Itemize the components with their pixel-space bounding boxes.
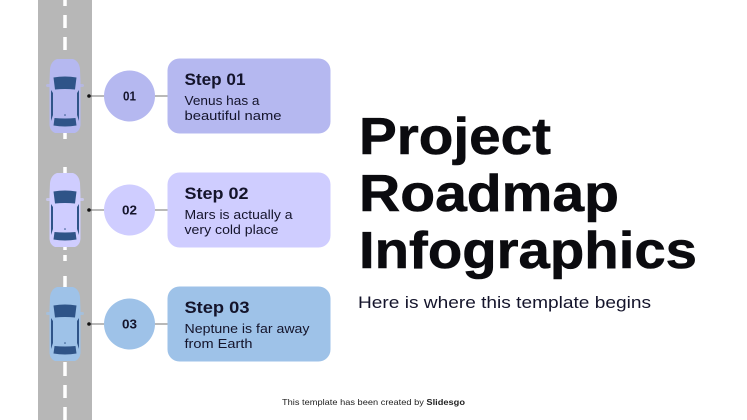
subtitle: Here is where this template begins — [358, 294, 651, 312]
connector 1 — [87, 94, 168, 98]
panel: step 3: Neptune is far away — [184, 321, 310, 336]
panel: step 3: Step 03 — [184, 298, 250, 317]
car 3 — [46, 287, 84, 361]
panel: step 2: very cold place — [184, 222, 278, 237]
panel: step 3 — [168, 286, 330, 362]
connector 2 — [87, 208, 168, 212]
car 2 — [46, 173, 84, 247]
panel: step 2: Step 02 — [184, 184, 248, 203]
step 1 number badge — [104, 70, 155, 122]
road — [38, 0, 92, 420]
title — [359, 108, 697, 280]
panel: step 1 — [168, 58, 330, 134]
panel: step 2 — [168, 172, 330, 248]
panel: step 2: Mars is actually a — [184, 207, 293, 222]
panel: step 1: Venus has a — [184, 93, 260, 108]
step 3 number badge: 03 — [122, 318, 137, 332]
title: Infographics — [359, 222, 697, 280]
panel: step 1: Step 01 — [184, 70, 246, 89]
step 2 number badge — [104, 184, 155, 236]
step 2 number badge: 02 — [122, 204, 137, 218]
title: Project — [359, 108, 551, 166]
panel: step 3: from Earth — [184, 336, 252, 351]
credit: This template has been created by Slidesgo — [282, 397, 465, 407]
car 1 — [46, 59, 84, 133]
connector 3 — [87, 322, 168, 326]
title: Roadmap — [359, 165, 619, 223]
step 1 number badge: 01 — [123, 90, 136, 104]
step 3 number badge — [104, 298, 155, 350]
panel: step 1: beautiful name — [184, 108, 282, 123]
